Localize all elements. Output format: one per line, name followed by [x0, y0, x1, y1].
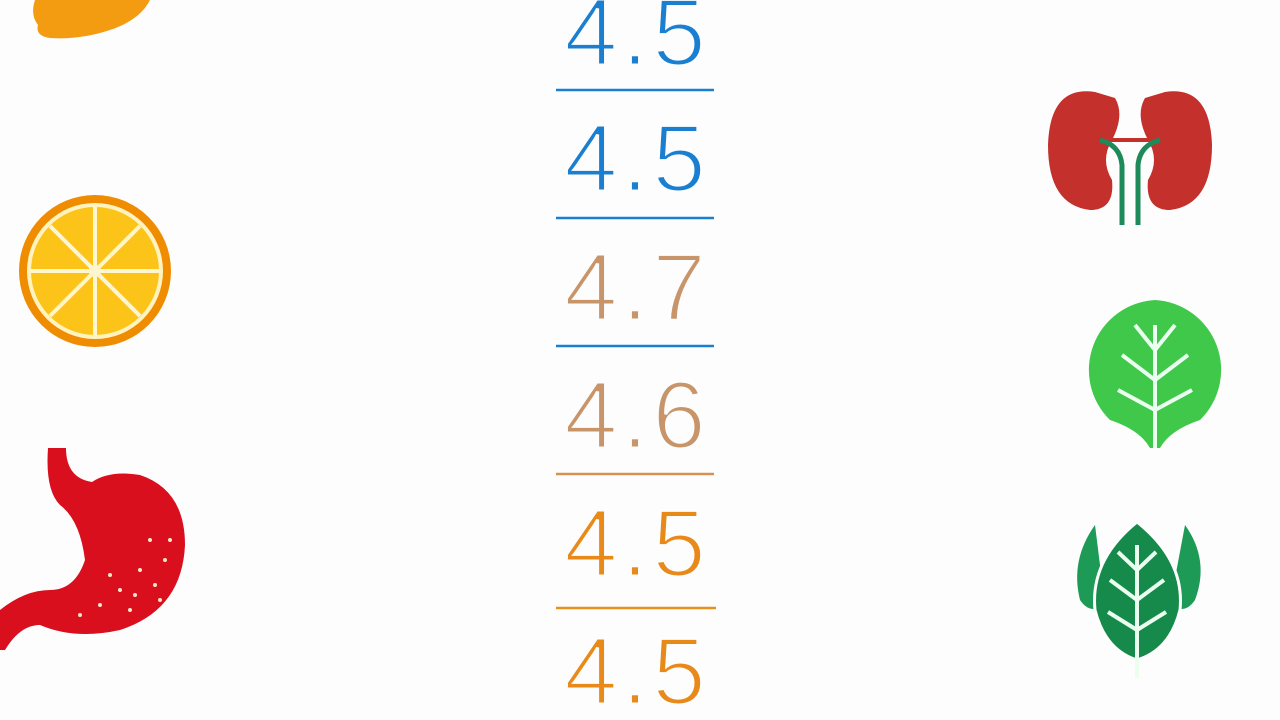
number 3: 4.7: [564, 234, 710, 341]
icon: stomach: [0, 448, 185, 650]
number 5: 4.5: [564, 490, 710, 597]
divider lines: [556, 90, 716, 608]
icon: orange (top, cut off): [33, 0, 150, 38]
icon: kidneys: [1048, 91, 1212, 225]
icon: spinach leaf: [1077, 522, 1201, 678]
icon: green leaf circle: [1089, 300, 1221, 448]
number 2: 4.5: [564, 105, 710, 212]
icon: lemon slice: [19, 195, 171, 347]
number 4: 4.6: [564, 362, 710, 469]
